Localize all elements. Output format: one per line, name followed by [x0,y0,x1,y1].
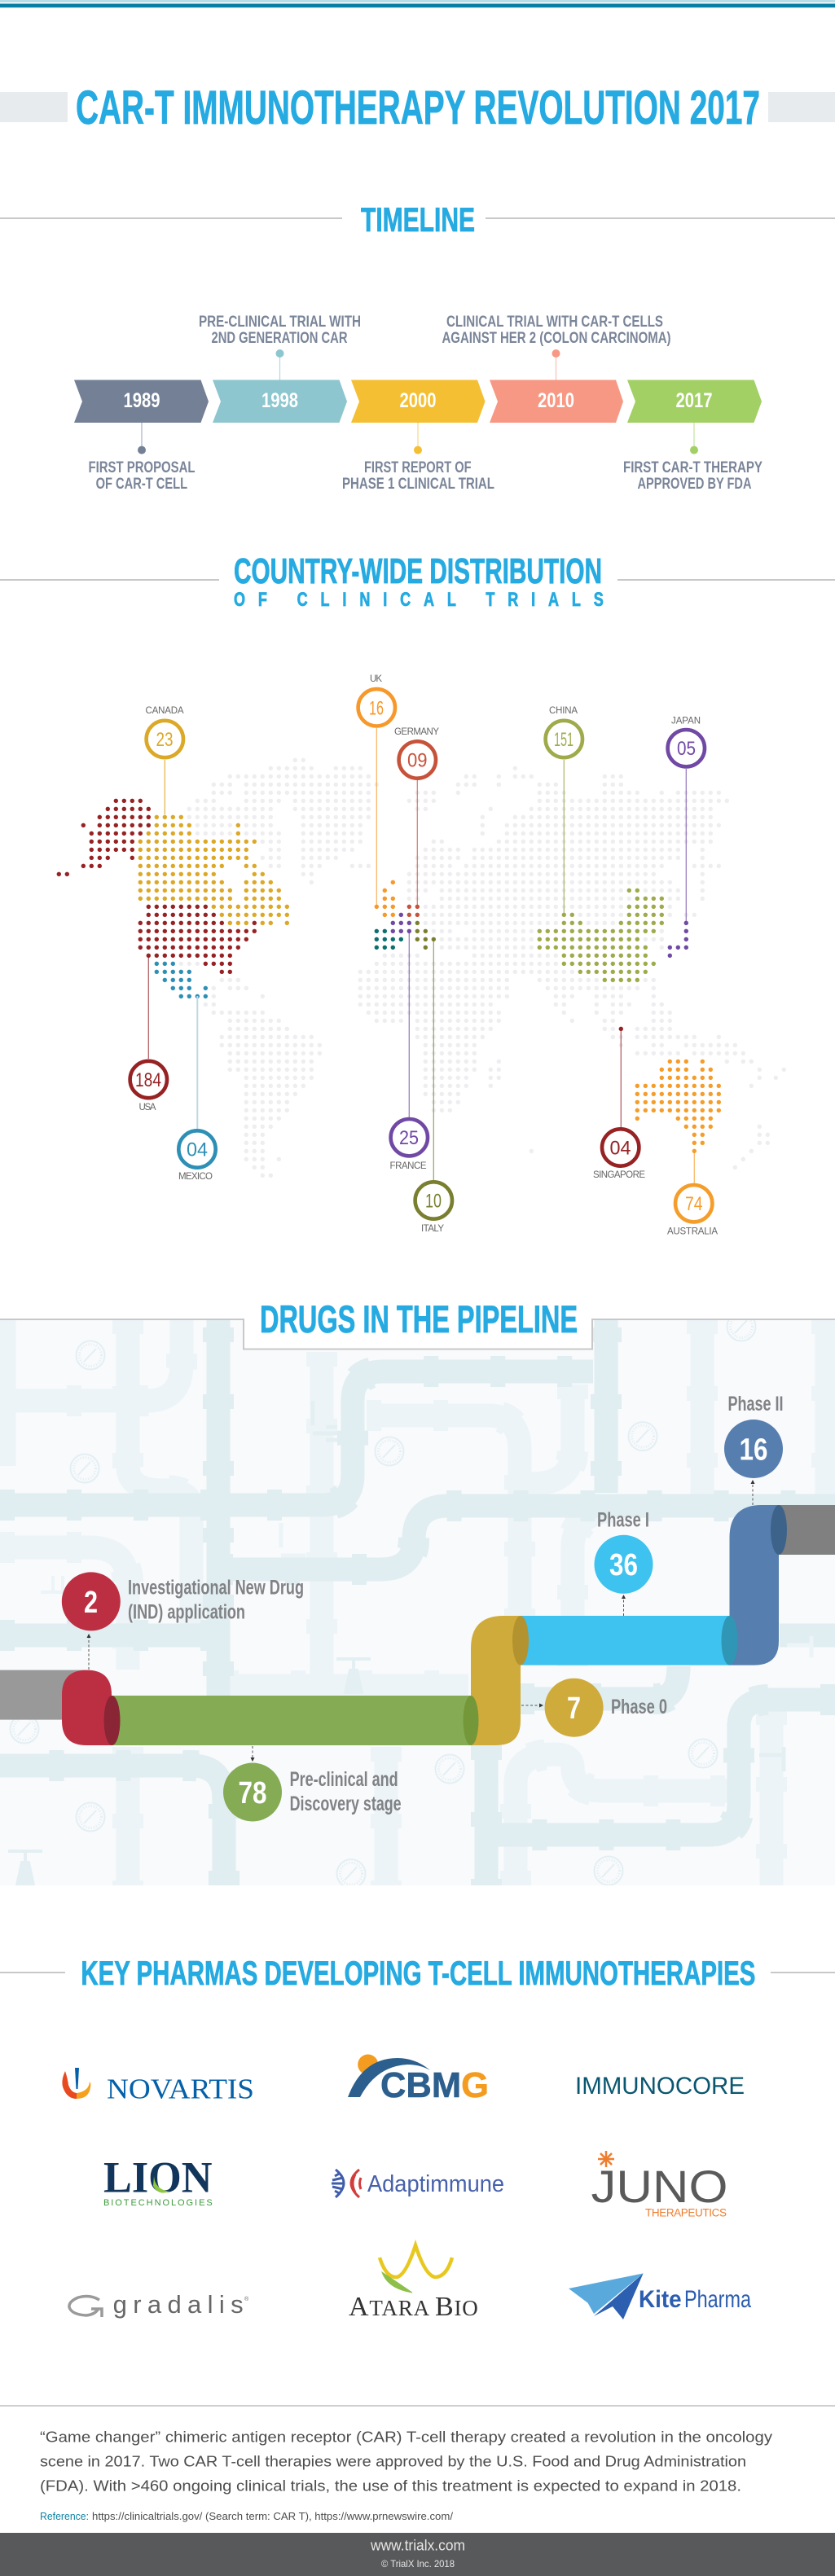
milestone 2010: AGAINST HER 2 (COLON CARCINOMA) [442,329,671,347]
callout: Singapore: SINGAPORE [593,1170,645,1180]
logo: Gradalis: gradalis [113,2290,244,2319]
Mexico dots [156,963,205,996]
Australia dots [637,1061,719,1151]
stage: phase 0: Phase 0 [611,1696,667,1718]
callout: Mexico: MEXICO [178,1172,213,1182]
milestone 1989: FIRST PROPOSAL [88,459,196,476]
footer [0,2533,835,2576]
stage: phase II [724,1393,784,1505]
logo: Novartis: NOVARTIS [107,2073,254,2104]
callout: Japan: JAPAN [671,717,701,726]
pipe: phase I [521,1616,730,1665]
stage: pre-clinical: Discovery stage [290,1793,402,1815]
callout: Singapore: 04 [609,1137,631,1160]
footer: © TrialX Inc. 2018 [381,2558,455,2569]
milestone 2000: PHASE 1 CLINICAL TRIAL [342,475,494,493]
logo: Adaptimmune: Adaptimmune [367,2171,504,2197]
pipe inlet [0,1670,85,1720]
stage: phase I: 36 [609,1548,638,1582]
callout: Canada: CANADA [145,706,184,716]
callout: Australia: AUSTRALIA [667,1227,718,1237]
logo: Gradalis: ® [244,2296,249,2302]
pipe: IND elbow [62,1670,112,1745]
pipe joint green [463,1696,479,1745]
milestone 2000: FIRST REPORT OF [364,459,472,476]
callout: Australia [667,1151,718,1237]
callout: France: 25 [399,1127,419,1149]
callout: China: CHINA [549,706,578,716]
stage: phase 0: 7 [567,1692,581,1726]
milestone 2017: APPROVED BY FDA [637,475,751,493]
callout: Mexico: 04 [187,1139,208,1161]
stage: phase I [595,1509,653,1616]
stage: IND: (IND) application [128,1600,245,1623]
callout: USA: USA [138,1103,156,1112]
callout: UK [358,674,395,906]
Italy dots [417,923,433,947]
logo: Juno Therapeutics [591,2151,728,2218]
logo: CBMG: CBMG [380,2065,489,2105]
summary text: “Game changer” chimeric antigen receptor (CAR) T-cell therapy created a revolution in the oncology [40,2429,773,2446]
pipe joint blue [722,1616,738,1665]
stage: IND: Investigational New Drug [128,1577,304,1600]
summary text: (FDA). With >460 ongoing clinical trials, the use of this treatment is expected to expand in 2018. [40,2477,741,2494]
stage: phase II: Phase II [728,1393,784,1415]
timeline chart [74,313,762,493]
stage: phase II: 16 [740,1433,767,1468]
stage: pre-clinical: 78 [238,1776,267,1810]
logo: Juno Therapeutics: THERAPEUTICS [645,2207,727,2218]
top band [0,0,835,7]
logo: Atara Bio [349,2245,479,2322]
logo: Lion Biotechnologies: LION [103,2153,212,2202]
stage: pre-clinical [223,1746,402,1821]
callout: Germany: GERMANY [394,727,439,737]
heading: timeline: TIMELINE [361,200,475,239]
milestone 1998: PRE-CLINICAL TRIAL WITH [199,313,361,331]
China dots [539,890,661,980]
callout: France [389,931,428,1171]
milestone 2000: 2000 [399,389,437,412]
milestone 2000 [342,380,494,493]
milestone 2017: FIRST CAR-T THERAPY [623,459,762,476]
milestone 1998: 2ND GENERATION CAR [212,329,347,347]
Germany dots [409,906,417,915]
logo: Kite Pharma [569,2273,751,2319]
callout: Japan: 05 [677,738,696,760]
milestone 2010: 2010 [538,389,574,412]
reference: https://clinicaltrials.gov/ (Search term: CAR T), https://www.prnewswire.com/ [92,2510,453,2522]
milestone 1998: 1998 [261,389,298,412]
callout: China [546,706,582,915]
panel: drugs in the pipeline [0,1297,835,1888]
logo: Novartis [62,2068,254,2104]
callout: Canada: 23 [156,729,173,751]
callout: Canada [145,706,184,814]
footer: www.trialx.com [370,2538,465,2554]
callout: USA [130,955,167,1112]
callout: France: FRANCE [389,1161,427,1171]
Japan dots [670,923,686,955]
Singapore dot [620,1028,622,1029]
summary text [40,2429,773,2494]
pipeline background [0,1313,835,1888]
milestone 2017: 2017 [676,389,712,412]
milestone 1989 [74,380,209,493]
divider [0,2405,835,2407]
callout: USA: 184 [135,1069,161,1091]
pipe outlet [779,1505,835,1555]
pipe joint dark blue [771,1505,787,1555]
milestone 2010 [442,313,671,423]
callout: UK: UK [370,674,382,684]
logo: Juno Therapeutics: JUNO [591,2161,728,2212]
pipe: phase 0 elbow [471,1616,521,1745]
heading: country-wide distribution: COUNTRY-WIDE DISTRIBUTION [234,551,602,591]
milestone 1998 [199,313,361,423]
callout: Mexico [178,996,216,1182]
pipeline heading: DRUGS IN THE PIPELINE [260,1297,578,1341]
stage: phase I: Phase I [597,1509,649,1532]
gray world dots [181,760,784,1175]
summary text: scene in 2017. Two CAR T-cell therapies were approved by the U.S. Food and Drug Administration [40,2453,746,2470]
callout: UK: 16 [369,697,384,719]
callout: Italy: 10 [425,1191,442,1212]
pipeline heading [0,1297,835,1349]
coloured pipeline [0,1505,835,1745]
logo: Lion Biotechnologies: BIOTECHNOLOGIES [103,2198,213,2208]
pipe joint red [104,1696,121,1745]
milestone 1989: 1989 [124,389,160,412]
pipe joint yellow [512,1616,529,1665]
callout: Germany [394,727,439,906]
callout: Australia: 74 [685,1193,702,1215]
stage: IND: 2 [84,1586,98,1620]
milestone 2017 [623,380,762,493]
logo: Immunocore: IMMUNOCORE [575,2073,745,2100]
Spain dots [376,931,401,947]
milestone 1989: OF CAR-T CELL [96,475,187,493]
callout: Singapore [593,1029,645,1180]
milestone 2010: CLINICAL TRIAL WITH CAR-T CELLS [446,313,663,331]
logo: Kite Pharma: Kite [639,2286,682,2313]
France dots [393,915,409,931]
Canada dots [140,817,287,923]
stage: IND [62,1572,304,1670]
logo: Atara Bio: ATARA BIO [349,2292,479,2322]
reference: Reference: [40,2510,89,2522]
callout: Germany: 09 [407,749,427,772]
USA dots [59,801,254,972]
callout: Japan [668,717,705,923]
pipe: pre-clinical [112,1696,471,1745]
logo: Kite Pharma: Pharma [684,2286,751,2313]
heading: country-wide distribution: OF CLINICAL TRIALS [234,590,604,611]
stage: pre-clinical: Pre-clinical and [290,1768,398,1791]
stage: phase 0 [521,1679,667,1737]
logo: CBMG [348,2054,489,2105]
callout: Italy [415,939,452,1234]
callout: China: 151 [554,729,574,751]
UK dots [376,882,393,915]
heading: country-wide distribution [0,551,835,611]
callout: Italy: ITALY [421,1224,444,1234]
dot world map [59,760,784,1175]
pipe: phase II elbow [730,1505,779,1665]
